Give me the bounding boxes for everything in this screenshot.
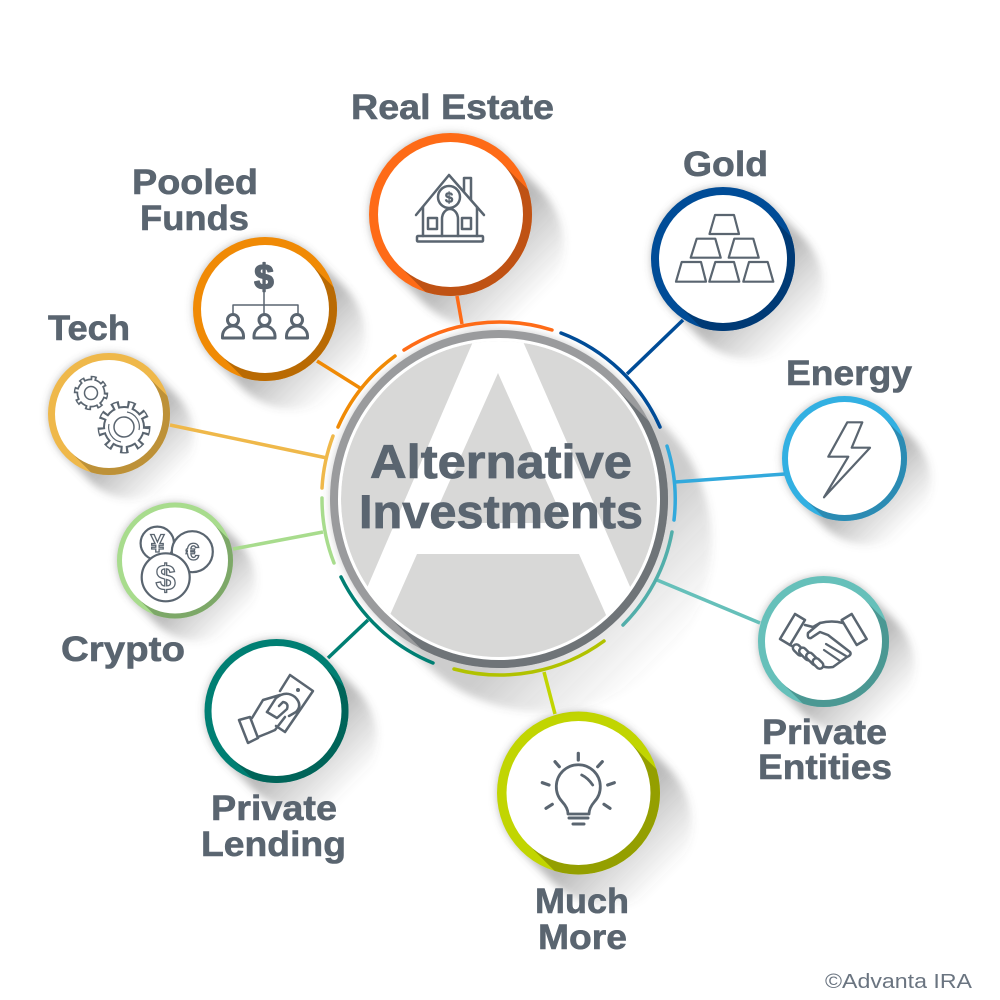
- node: real estate: [364, 128, 564, 328]
- label: energy: Energy: [786, 354, 913, 393]
- icon: coins: ¥: [151, 530, 165, 558]
- label: much more: More: [538, 918, 627, 957]
- icon: handshake: [780, 614, 867, 670]
- node: energy: [778, 392, 932, 546]
- label: gold: Gold: [683, 145, 768, 184]
- node: crypto: [112, 498, 256, 642]
- label: much more: Much: [535, 882, 629, 921]
- center title: Investments: [359, 485, 643, 538]
- label: pooled funds: Pooled: [132, 163, 258, 202]
- label: private entities: [758, 713, 892, 787]
- logo: letter A watermark: [336, 330, 662, 660]
- label: private entities: Entities: [758, 748, 892, 787]
- icon: coins: [141, 527, 213, 601]
- label: private lending: Private: [211, 789, 337, 828]
- connector: crypto: [233, 498, 334, 563]
- connector: private entities: [623, 532, 760, 625]
- icon: coins: €: [186, 539, 199, 566]
- icon: gears: [76, 378, 147, 450]
- node: gold: [646, 182, 824, 360]
- label: tech: Tech: [48, 309, 130, 348]
- connector: tech: [170, 425, 333, 488]
- icon: hand with banknote: [239, 675, 313, 743]
- node: private entities: [754, 572, 916, 733]
- icon: light bulb: [542, 753, 614, 824]
- icon: lightning bolt: [824, 422, 870, 497]
- connector: real estate: [404, 296, 552, 350]
- node: much more: [492, 707, 692, 907]
- connector: pooled funds: [317, 356, 395, 427]
- copyright: ©Advanta IRA: [825, 971, 973, 993]
- label: much more: [535, 882, 629, 957]
- icon: coins: $: [156, 557, 176, 598]
- connector: energy: [667, 446, 785, 520]
- label: private lending: Lending: [201, 825, 346, 864]
- icon: house with dollar: [416, 175, 484, 242]
- connector: private lending: [328, 577, 433, 663]
- label: real estate: Real Estate: [351, 88, 554, 127]
- label: private lending: [201, 789, 346, 864]
- node: private lending: [200, 634, 378, 812]
- node: pooled funds: [188, 232, 366, 410]
- label: crypto: Crypto: [61, 630, 185, 669]
- icon: dollar and three people: [222, 258, 308, 338]
- center title: Alternative: [370, 435, 632, 488]
- label: private entities: Private: [762, 713, 887, 752]
- icon: house with dollar: $: [445, 190, 454, 206]
- label: pooled funds: [132, 163, 258, 238]
- icon: dollar and three people: $: [254, 258, 274, 297]
- icon: gold bars: [676, 215, 773, 282]
- central circle: [326, 326, 713, 713]
- node: tech: [44, 348, 195, 500]
- connector: gold: [561, 320, 683, 427]
- connector: much more: [454, 641, 604, 714]
- center title: [359, 435, 643, 538]
- label: pooled funds: Funds: [140, 199, 249, 238]
